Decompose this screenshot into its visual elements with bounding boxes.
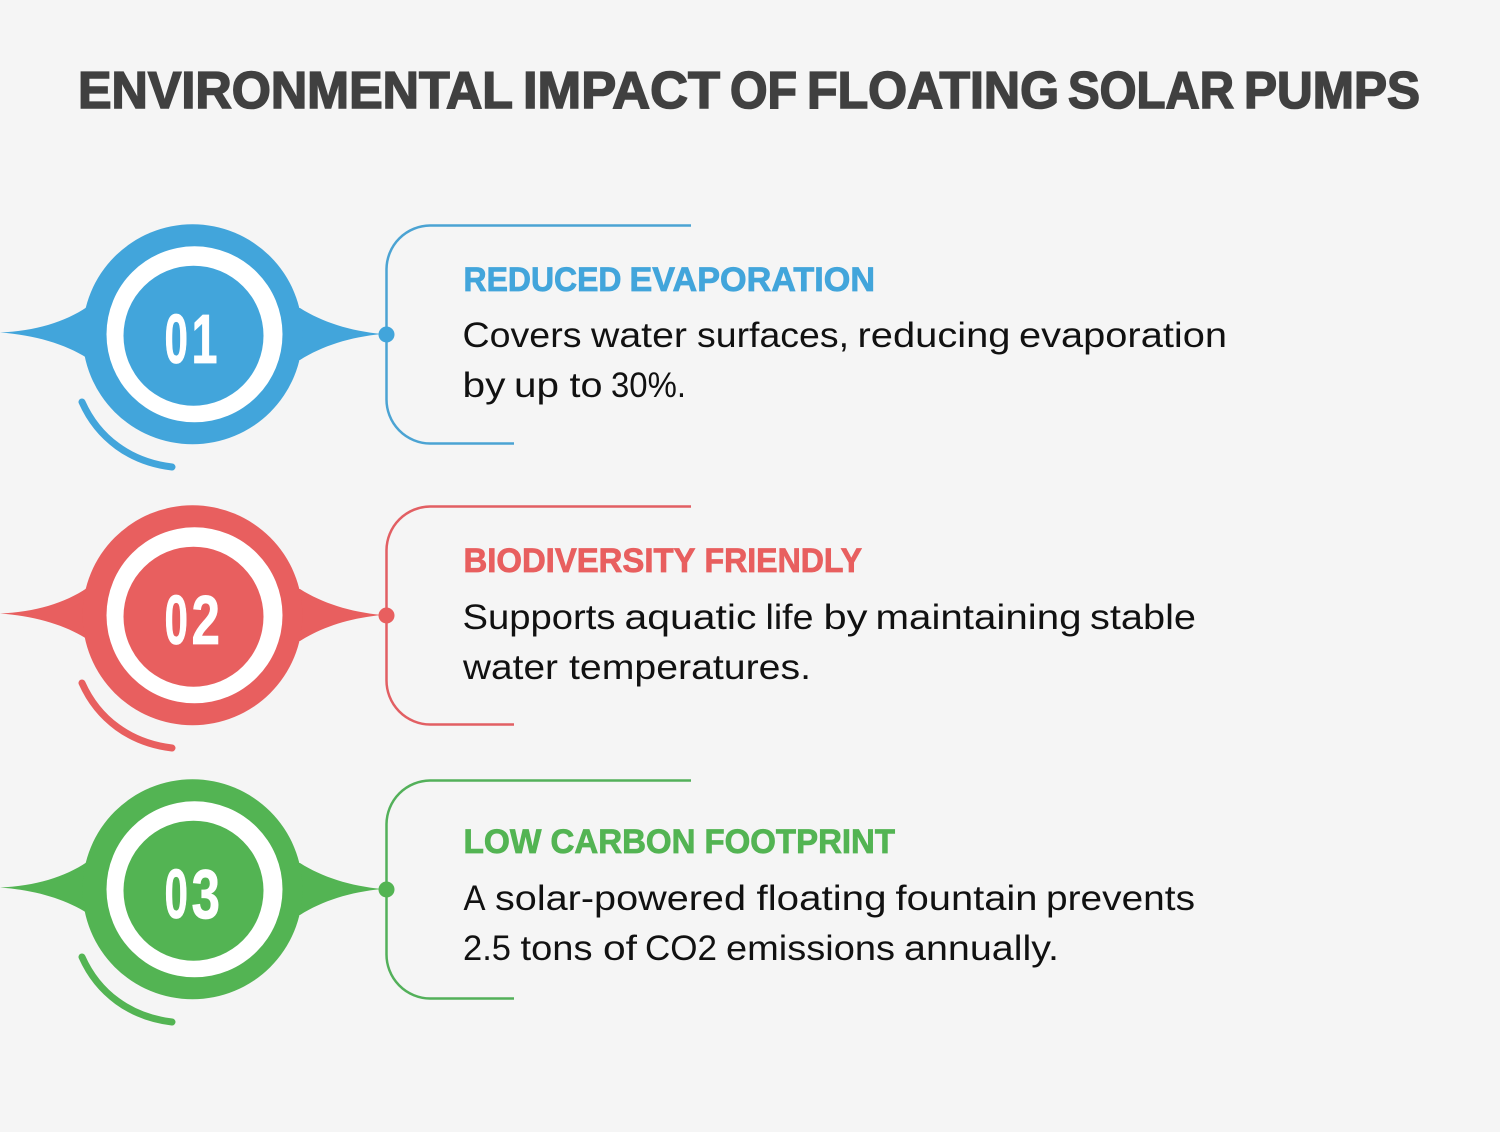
text block: reduced evaporation: to (570, 365, 602, 405)
heading: reduced evaporation (464, 261, 875, 299)
text block: low carbon footprint: of (603, 928, 637, 968)
text block: reduced evaporation: by (462, 365, 506, 405)
icon: blue number badge 01: 0 (164, 300, 188, 378)
text block: low carbon footprint: tons (520, 928, 592, 968)
text block: biodiversity friendly: temperatures. (569, 647, 811, 687)
heading: low carbon footprint: FOOTPRINT (704, 823, 895, 861)
bracket connector (378, 506, 691, 724)
text block: biodiversity friendly: water (462, 647, 558, 687)
heading: biodiversity friendly (464, 542, 862, 580)
panel: biodiversity friendly (0, 505, 1196, 748)
icon: red number badge 02: 2 (192, 581, 220, 659)
icon: green number badge 03 (0, 779, 382, 1022)
text block: reduced evaporation: Covers (462, 315, 582, 355)
title: SOLAR (1068, 62, 1234, 120)
heading: low carbon footprint (464, 823, 895, 861)
text block: biodiversity friendly: aquatic (624, 597, 756, 637)
heading: biodiversity friendly: FRIENDLY (704, 542, 862, 580)
panel: low carbon footprint (0, 779, 1195, 1022)
icon: red number badge 02: 0 (164, 581, 188, 659)
heading: reduced evaporation: REDUCED (464, 261, 622, 299)
title: OF (730, 62, 797, 120)
icon: green number badge 03: 0 (164, 855, 188, 933)
heading: low carbon footprint: LOW (464, 823, 542, 861)
text block: low carbon footprint: solar-powered (495, 878, 746, 918)
text block: low carbon footprint: 2.5 (463, 928, 511, 968)
text block: biodiversity friendly (462, 597, 1196, 687)
text block: low carbon footprint: floating (756, 878, 886, 918)
text block: biodiversity friendly: life (766, 597, 814, 637)
text block: reduced evaporation: 30%. (611, 365, 686, 405)
text block: low carbon footprint: CO2 (645, 928, 717, 968)
text block: reduced evaporation: water (590, 315, 687, 355)
title: FLOATING (807, 62, 1059, 120)
title: ENVIRONMENTAL (78, 62, 513, 120)
text block: reduced evaporation: reducing (858, 315, 1010, 355)
heading: reduced evaporation: EVAPORATION (630, 261, 875, 299)
bracket connector (378, 226, 691, 444)
text block: biodiversity friendly: by (824, 597, 868, 637)
text block: biodiversity friendly: Supports (462, 597, 616, 637)
icon: red number badge 02 (0, 505, 382, 748)
text block: biodiversity friendly: maintaining (876, 597, 1082, 637)
title (78, 62, 1420, 120)
text block: reduced evaporation: evaporation (1019, 315, 1227, 355)
icon: green number badge 03: 3 (192, 855, 220, 933)
text block: low carbon footprint (463, 878, 1195, 968)
text block: low carbon footprint: fountain (896, 878, 1038, 918)
title: IMPACT (523, 62, 720, 120)
icon: blue number badge 01: 1 (192, 300, 218, 378)
icon: blue number badge 01 (0, 224, 382, 467)
heading: biodiversity friendly: BIODIVERSITY (464, 542, 696, 580)
text block: low carbon footprint: A (464, 878, 486, 918)
title: PUMPS (1244, 62, 1420, 120)
text block: reduced evaporation: up (514, 365, 559, 405)
text block: low carbon footprint: prevents (1046, 878, 1195, 918)
text block: low carbon footprint: annually. (904, 928, 1059, 968)
text block: reduced evaporation: surfaces, (697, 315, 849, 355)
panel: reduced evaporation (0, 224, 1227, 467)
bracket connector (378, 780, 691, 998)
text block: reduced evaporation (462, 315, 1227, 405)
text block: low carbon footprint: emissions (726, 928, 895, 968)
heading: low carbon footprint: CARBON (550, 823, 696, 861)
text block: biodiversity friendly: stable (1090, 597, 1196, 637)
